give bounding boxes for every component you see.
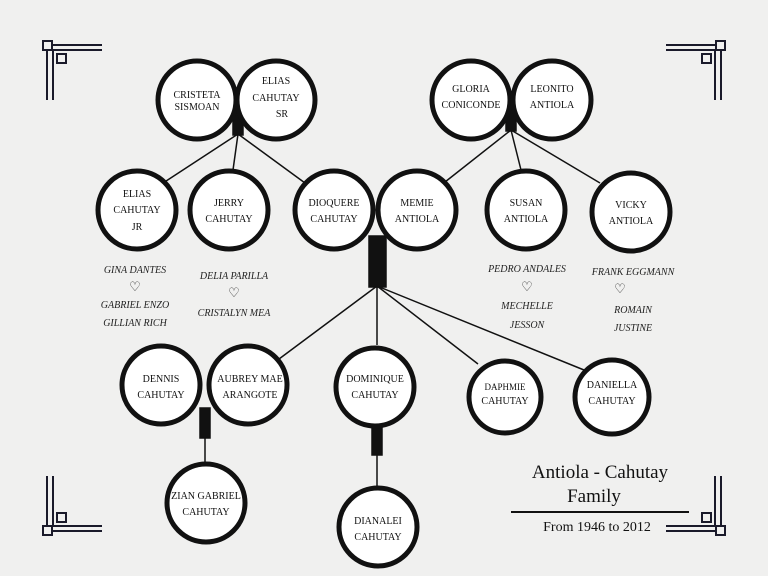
person circles — [98, 61, 670, 566]
names: MEMIE — [400, 198, 434, 209]
names: GLORIA — [452, 84, 491, 95]
names: CRISTETA — [174, 90, 221, 101]
connectors — [160, 106, 600, 488]
spouses and children notes: JESSON — [510, 320, 546, 331]
names: ANTIOLA — [504, 214, 549, 225]
names: JR — [132, 222, 143, 233]
names: ANTIOLA — [395, 214, 440, 225]
spouses and children notes: CRISTALYN MEA — [198, 308, 271, 319]
names: CAHUTAY — [354, 532, 402, 543]
names: CAHUTAY — [182, 507, 230, 518]
names: LEONITO — [530, 84, 574, 95]
names: DENNIS — [143, 374, 179, 385]
names: DAPHMIE — [484, 382, 526, 392]
title block: Family — [567, 486, 621, 507]
spouses and children notes: ♡ — [129, 279, 141, 294]
spouses and children notes: ♡ — [614, 281, 626, 296]
title block: From 1946 to 2012 — [543, 520, 651, 535]
names: DANIELLA — [587, 380, 638, 391]
names: CONICONDE — [442, 100, 500, 111]
spouses and children notes: GILLIAN RICH — [103, 318, 168, 329]
spouses and children notes: ♡ — [228, 285, 240, 300]
names: ANTIOLA — [530, 100, 575, 111]
ornament: bottom-right — [666, 476, 725, 535]
spouses and children notes: GABRIEL ENZO — [101, 300, 169, 311]
names: ELIAS — [262, 76, 290, 87]
names: SISMOAN — [174, 102, 220, 113]
names: CAHUTAY — [588, 396, 636, 407]
names: DIANALEI — [354, 516, 402, 527]
names: CAHUTAY — [481, 396, 529, 407]
spouses and children notes: MECHELLE — [500, 301, 553, 312]
spouses and children notes: GINA DANTES — [104, 265, 166, 276]
names: CAHUTAY — [252, 93, 300, 104]
names: CAHUTAY — [351, 390, 399, 401]
names: CAHUTAY — [205, 214, 253, 225]
names: JERRY — [214, 198, 244, 209]
spouses and children notes: FRANK EGGMANN — [591, 267, 676, 278]
names: CAHUTAY — [310, 214, 358, 225]
names: ZIAN GABRIEL — [171, 491, 241, 502]
ornament: top-left — [43, 41, 102, 100]
names: ELIAS — [123, 189, 151, 200]
spouses and children notes: ROMAIN — [613, 305, 653, 316]
names: DIOQUERE — [308, 198, 360, 209]
spouses and children notes: DELIA PARILLA — [199, 271, 269, 282]
ornament: bottom-left — [43, 476, 102, 535]
names: SUSAN — [510, 198, 542, 209]
names: VICKY — [615, 200, 647, 211]
spouses and children notes: JUSTINE — [614, 323, 652, 334]
names: SR — [276, 109, 288, 120]
spouses and children notes — [101, 264, 676, 334]
names: DOMINIQUE — [346, 374, 404, 385]
names: ARANGOTE — [222, 390, 278, 401]
names — [113, 76, 654, 543]
title block — [511, 462, 689, 535]
spouses and children notes: PEDRO ANDALES — [487, 264, 566, 275]
names: AUBREY MAE — [217, 374, 283, 385]
names: CAHUTAY — [137, 390, 185, 401]
names: ANTIOLA — [609, 216, 654, 227]
title block: Antiola - Cahutay — [532, 462, 669, 483]
spouses and children notes: ♡ — [521, 279, 533, 294]
names: CAHUTAY — [113, 205, 161, 216]
ornament: top-right — [666, 41, 725, 100]
